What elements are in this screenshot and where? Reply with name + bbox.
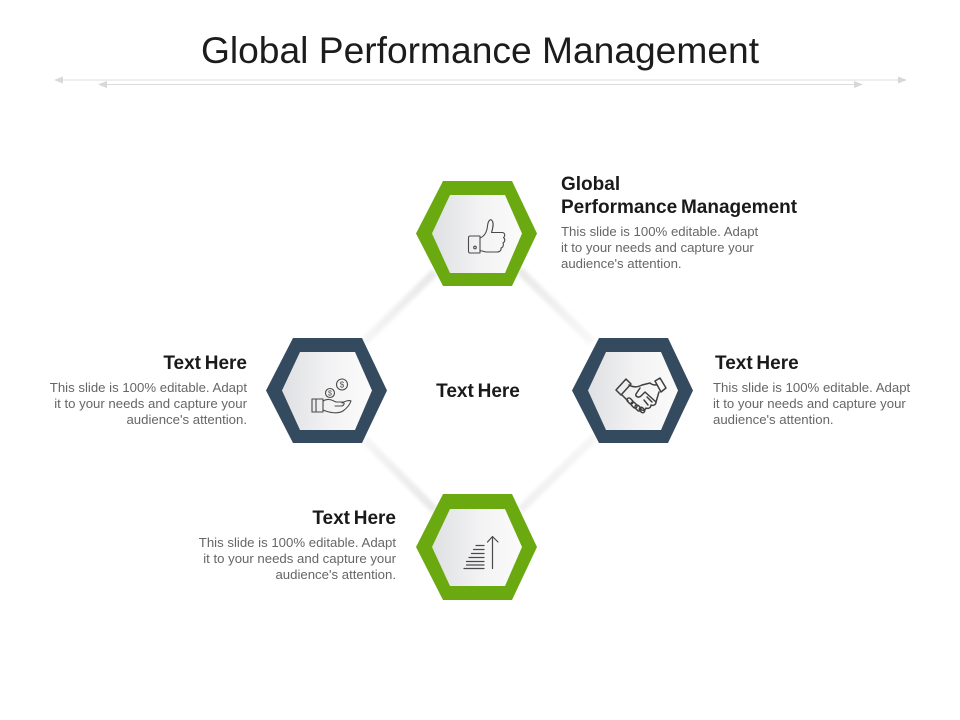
text block: left: audience's attention. xyxy=(126,412,247,427)
text block: top: it to your needs and capture your xyxy=(561,240,754,255)
text block: bottom: it to your needs and capture your xyxy=(203,551,396,566)
text block: bottom: audience's attention. xyxy=(275,567,396,582)
icon: stairs and up arrow xyxy=(464,536,498,568)
text block: right: it to your needs and capture your xyxy=(713,396,906,411)
icon: hand with coins: $ xyxy=(328,390,332,398)
hexagon: right xyxy=(572,338,693,443)
icon: hand with coins xyxy=(312,379,351,413)
title: Global Performance Management xyxy=(201,29,759,71)
text block: right: This slide is 100% editable. Adapt xyxy=(713,380,910,395)
text block: top xyxy=(561,174,797,271)
icon: hand with coins: $ xyxy=(340,380,345,390)
hexagon: left xyxy=(266,338,387,443)
text block: bottom: Text Here xyxy=(312,508,396,529)
text block: top: audience's attention. xyxy=(561,256,682,271)
hexagon: bottom xyxy=(416,494,537,600)
text block: bottom: This slide is 100% editable. Adapt xyxy=(199,535,396,550)
icon: thumbs up xyxy=(468,220,505,253)
text block: left xyxy=(50,353,247,427)
text block: left: This slide is 100% editable. Adapt xyxy=(50,380,247,395)
title divider arrows xyxy=(54,76,907,88)
connectors between hexagons xyxy=(364,270,595,510)
text block: right: audience's attention. xyxy=(713,412,834,427)
text block: bottom xyxy=(199,508,396,582)
text block: top: Performance Management xyxy=(561,197,797,218)
text block: right: Text Here xyxy=(715,353,799,374)
text block: left: it to your needs and capture your xyxy=(54,396,247,411)
text block: right xyxy=(713,353,910,427)
icon: handshake xyxy=(616,378,666,414)
center label: Text Here xyxy=(436,381,520,402)
text block: top: This slide is 100% editable. Adapt xyxy=(561,224,758,239)
text block: top: Global xyxy=(561,174,620,195)
hexagon: top xyxy=(416,181,537,286)
text block: left: Text Here xyxy=(163,353,247,374)
